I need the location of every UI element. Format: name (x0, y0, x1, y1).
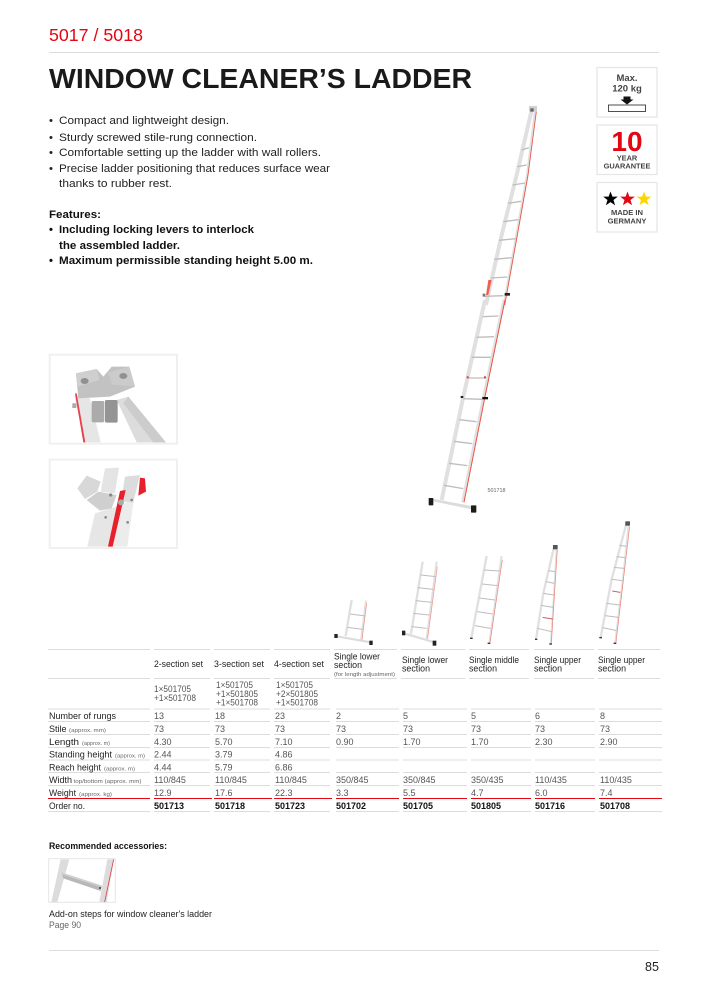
column headers: section (334, 660, 362, 670)
accessory caption: Page 90 (49, 920, 81, 930)
column headers: (for length adjustment) (334, 672, 395, 678)
column: single middle section: 5 (471, 711, 476, 721)
column: single upper section, 8 rungs: 501708 (600, 801, 630, 811)
column: 4-section set: 7.10 (275, 737, 293, 747)
row labels (49, 711, 145, 811)
row labels: (approx. m) (82, 741, 110, 747)
column: 3-section set: 5.70 (215, 737, 233, 747)
column: single upper section, 6 rungs: 2.30 (535, 737, 553, 747)
set composition row: +1×501708 (154, 693, 196, 703)
row labels: Length (49, 737, 79, 747)
small ladder: single upper section, 8 rungs (599, 521, 630, 644)
feature bullet list: Compact and lightweight design. (59, 115, 229, 127)
column: single lower section: 501705 (403, 801, 433, 811)
column headers: Single upper (534, 655, 581, 665)
column: single middle section: 73 (471, 724, 481, 734)
column: 2-section set (154, 711, 186, 811)
column: 4-section set (275, 711, 307, 811)
column: single middle section: 350/435 (471, 775, 504, 785)
small ladder: single lower section for length adjustment (334, 600, 373, 645)
column: single middle section: 501805 (471, 801, 501, 811)
title: WINDOW CLEANER’S LADDER (49, 63, 472, 94)
column headers: 4-section set (274, 659, 325, 669)
row labels: (approx. m) (115, 754, 145, 760)
features block: • (49, 224, 53, 236)
column: 4-section set: 22.3 (275, 788, 293, 798)
badge: 10 year guarantee (597, 125, 657, 174)
set composition row: 1×501705 (216, 680, 253, 690)
features block: Maximum permissible standing height 5.00 m. (59, 255, 313, 267)
column: 3-section set: 110/845 (215, 775, 247, 785)
column: single upper section, 6 rungs: 73 (535, 724, 545, 734)
column: single lower section: 73 (403, 724, 413, 734)
column: 4-section set: 501723 (275, 801, 305, 811)
set composition row: +2×501805 (276, 689, 318, 699)
lower part (429, 300, 505, 513)
column: 4-section set: 23 (275, 711, 285, 721)
column: 2-section set: 12.9 (154, 788, 172, 798)
feature bullet list: • (49, 147, 53, 159)
column headers: 3-section set (214, 659, 265, 669)
column: single upper section, 6 rungs: 501716 (535, 801, 565, 811)
column: 3-section set: 501718 (215, 801, 245, 811)
accessory photo: add-on steps (49, 859, 115, 902)
row labels: Weight (49, 788, 76, 798)
column: single lower section for length adjustment: 73 (336, 724, 346, 734)
row labels: Order no. (49, 801, 85, 811)
row labels: (approx. m) (104, 766, 135, 772)
badge: 10 year guarantee: GUARANTEE (604, 162, 650, 170)
feature bullet list (49, 115, 330, 190)
column headers: section (402, 664, 430, 674)
column: single middle section: 1.70 (471, 737, 489, 747)
column: 4-section set: 4.86 (275, 750, 293, 760)
column: 3-section set: 73 (215, 724, 225, 734)
detail photo: wall rollers (50, 355, 177, 444)
features block: Including locking levers to interlock (59, 224, 255, 236)
detail photo: locking lever (50, 460, 177, 548)
column: single upper section, 8 rungs: 73 (600, 724, 610, 734)
badge: 10 year guarantee: YEAR (617, 154, 638, 162)
badge: max load: 120 kg (612, 84, 642, 94)
column: 2-section set: 4.30 (154, 737, 172, 747)
column: single lower section: 5.5 (403, 788, 416, 798)
set composition row: +1×501805 (216, 689, 258, 699)
table rules (48, 650, 662, 812)
column headers: Single lower (402, 655, 448, 665)
column: 2-section set: 501713 (154, 801, 184, 811)
main ladder illustration (429, 106, 537, 513)
section number heading: 5017 / 5018 (49, 25, 143, 45)
feature bullet list: • (49, 115, 53, 127)
badge: max load: Max. (616, 73, 638, 84)
column: single lower section for length adjustment: 2 (336, 711, 341, 721)
row labels: Number of rungs (49, 711, 116, 721)
set composition row: +1×501708 (216, 698, 258, 708)
column: single upper section, 8 rungs (600, 711, 632, 811)
column: 3-section set (215, 711, 247, 811)
feature bullet list: Precise ladder positioning that reduces surface wear (59, 163, 330, 175)
column: 3-section set: 18 (215, 711, 225, 721)
feature bullet list: Comfortable setting up the ladder with wall rollers. (59, 147, 321, 159)
column headers: Single lower (334, 652, 380, 662)
column: single lower section for length adjustment: 350/845 (336, 775, 369, 785)
column headers: Single middle (469, 655, 519, 665)
column: 4-section set: 110/845 (275, 775, 307, 785)
column: single lower section for length adjustment: 3.3 (336, 788, 349, 798)
features block: • (49, 255, 53, 267)
column: single upper section, 8 rungs: 7.4 (600, 788, 613, 798)
set composition row: +1×501708 (276, 698, 318, 708)
column: 2-section set: 110/845 (154, 775, 186, 785)
badge: made in Germany: GERMANY (608, 216, 646, 226)
column: single upper section, 6 rungs: 6 (535, 711, 540, 721)
column: 3-section set: 3.79 (215, 750, 233, 760)
badge: max load (597, 68, 657, 117)
column: single upper section, 6 rungs: 110/435 (535, 775, 567, 785)
column: single upper section, 6 rungs (535, 711, 567, 811)
badge: made in Germany: MADE IN (611, 208, 643, 217)
column: single upper section, 6 rungs: 6.0 (535, 788, 548, 798)
column headers (154, 652, 645, 678)
column: single upper section, 8 rungs: 110/435 (600, 775, 632, 785)
column: single middle section: 4.7 (471, 788, 484, 798)
row labels: top/bottom (approx. mm) (74, 779, 142, 785)
features block (49, 209, 313, 267)
features block: the assembled ladder. (59, 240, 180, 252)
column: 3-section set: 17.6 (215, 788, 233, 798)
column: 4-section set: 6.86 (275, 762, 293, 772)
column: 3-section set: 5.79 (215, 762, 233, 772)
accessory caption: Add-on steps for window cleaner's ladder (49, 909, 212, 919)
column: single lower section: 1.70 (403, 737, 421, 747)
feature bullet list: • (49, 132, 53, 144)
small ladder: single lower section (402, 562, 437, 646)
page number: 85 (645, 960, 659, 974)
column headers: section (534, 664, 562, 674)
column: single lower section: 5 (403, 711, 408, 721)
ladder article number: 501718 (488, 488, 506, 494)
column headers: 2-section set (154, 659, 204, 669)
row labels: Width (49, 775, 72, 785)
column headers: section (598, 664, 626, 674)
column: single lower section for length adjustment: 501702 (336, 801, 366, 811)
upper part (483, 106, 537, 305)
row labels: Reach height (49, 762, 101, 772)
column: single middle section (471, 711, 504, 811)
row labels: Standing height (49, 750, 112, 760)
feature bullet list: Sturdy screwed stile-rung connection. (59, 132, 257, 144)
row labels: (approx. kg) (79, 792, 112, 798)
accessory caption (49, 909, 212, 930)
small ladder: single upper section, 6 rungs (535, 545, 558, 645)
specification table (48, 650, 662, 812)
column: 4-section set: 73 (275, 724, 285, 734)
recommended accessories heading: Recommended accessories: (49, 841, 167, 851)
set composition row: 1×501705 (154, 684, 191, 694)
column: 2-section set: 73 (154, 724, 164, 734)
badge: 10 year guarantee: 10 (611, 126, 643, 157)
column: 2-section set: 4.44 (154, 762, 172, 772)
set composition row: 1×501705 (276, 680, 313, 690)
column: single upper section, 8 rungs: 8 (600, 711, 605, 721)
feature bullet list: • (49, 163, 53, 175)
column: single lower section for length adjustment (336, 711, 369, 811)
column: single upper section, 8 rungs: 2.90 (600, 737, 618, 747)
features block: Features: (49, 209, 101, 221)
small ladder: single middle section (470, 556, 502, 644)
column headers: Single upper (598, 655, 645, 665)
row labels: (approx. mm) (69, 728, 106, 734)
feature bullet list: thanks to rubber rest. (59, 178, 172, 190)
column: single lower section: 350/845 (403, 775, 436, 785)
badge: made in Germany (597, 182, 657, 232)
column: 2-section set: 13 (154, 711, 164, 721)
column: 2-section set: 2.44 (154, 750, 172, 760)
row labels: Stile (49, 724, 67, 734)
column: single lower section (403, 711, 436, 811)
column headers: section (469, 664, 497, 674)
set composition row (154, 680, 318, 708)
column: single lower section for length adjustment: 0.90 (336, 737, 354, 747)
